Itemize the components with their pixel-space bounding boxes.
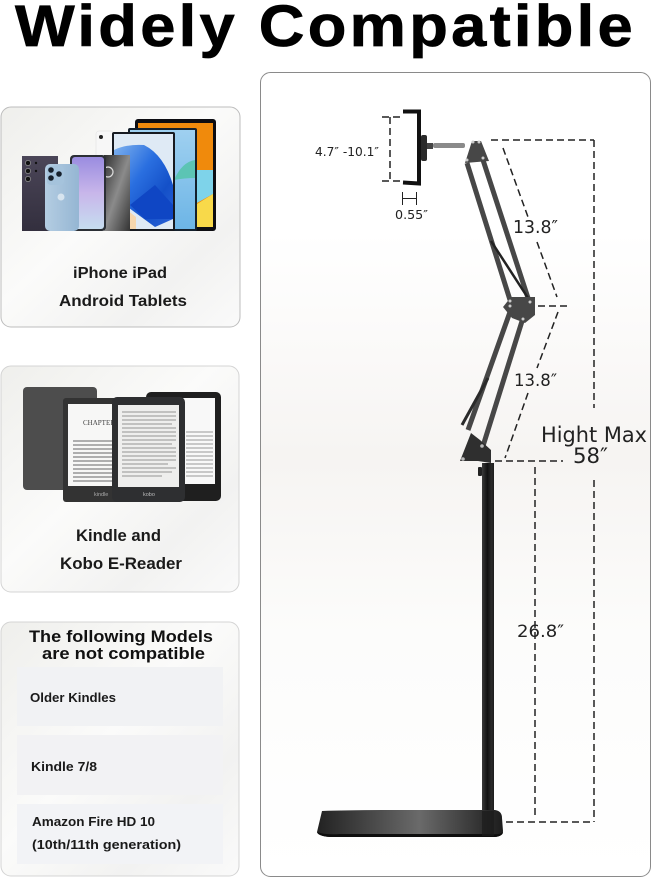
icon: group of e-readers: CHAPTER [83, 419, 115, 427]
label: upper arm length: 13.8″ [513, 217, 558, 238]
dimension lines [382, 117, 594, 822]
row: Older Kindles: Older Kindles [30, 690, 116, 705]
panel: iPhone iPad Android tablets [1, 107, 240, 327]
label: max height: Hight Max [541, 423, 647, 447]
text: Kindle and: Kindle and [76, 526, 161, 545]
label: max height: 58″ [573, 444, 608, 468]
heading: not compatible models [29, 627, 213, 663]
panel: stand dimensions [260, 72, 650, 876]
row: Amazon Fire HD 10 [17, 804, 223, 864]
text: Kobo E-Reader: Kobo E-Reader [60, 554, 182, 573]
stand: weighted base [317, 810, 503, 837]
heading: not compatible models: are not compatible [42, 644, 205, 663]
stand: pole [482, 463, 494, 815]
label: pole height: 26.8″ [517, 622, 564, 642]
label: clamp depth: 0.55″ [395, 208, 429, 222]
icon: clamp depth H [402, 192, 416, 205]
stand: phone clamp [403, 112, 465, 184]
row: Amazon Fire HD 10: Amazon Fire HD 10 [32, 814, 155, 829]
label: lower arm length: 13.8″ [514, 371, 557, 391]
stand: upper arm [465, 140, 528, 300]
icon: group of phones and tablets [22, 119, 216, 231]
panel: models not compatible [1, 622, 239, 876]
stand: lower arm [460, 297, 535, 463]
label: max height [541, 423, 647, 468]
icon: group of e-readers: kobo [143, 492, 155, 498]
row: Amazon Fire HD 10: (10th/11th generation) [32, 837, 181, 852]
icon: group of e-readers [23, 387, 221, 502]
icon: group of e-readers: kindle [94, 492, 108, 498]
row: Older Kindles [17, 667, 223, 726]
label: clamp range: 4.7″ -10.1″ [315, 144, 379, 159]
panel: Kindle and Kobo e-readers [1, 366, 239, 592]
text: Android Tablets: Android Tablets [59, 293, 187, 310]
row: Kindle 7/8: Kindle 7/8 [31, 759, 97, 774]
text: iPhone iPad: iPhone iPad [73, 265, 167, 282]
stand: pole knob [478, 467, 482, 476]
heading: not compatible models: The following Models [29, 627, 213, 646]
row: Kindle 7/8 [17, 735, 223, 795]
